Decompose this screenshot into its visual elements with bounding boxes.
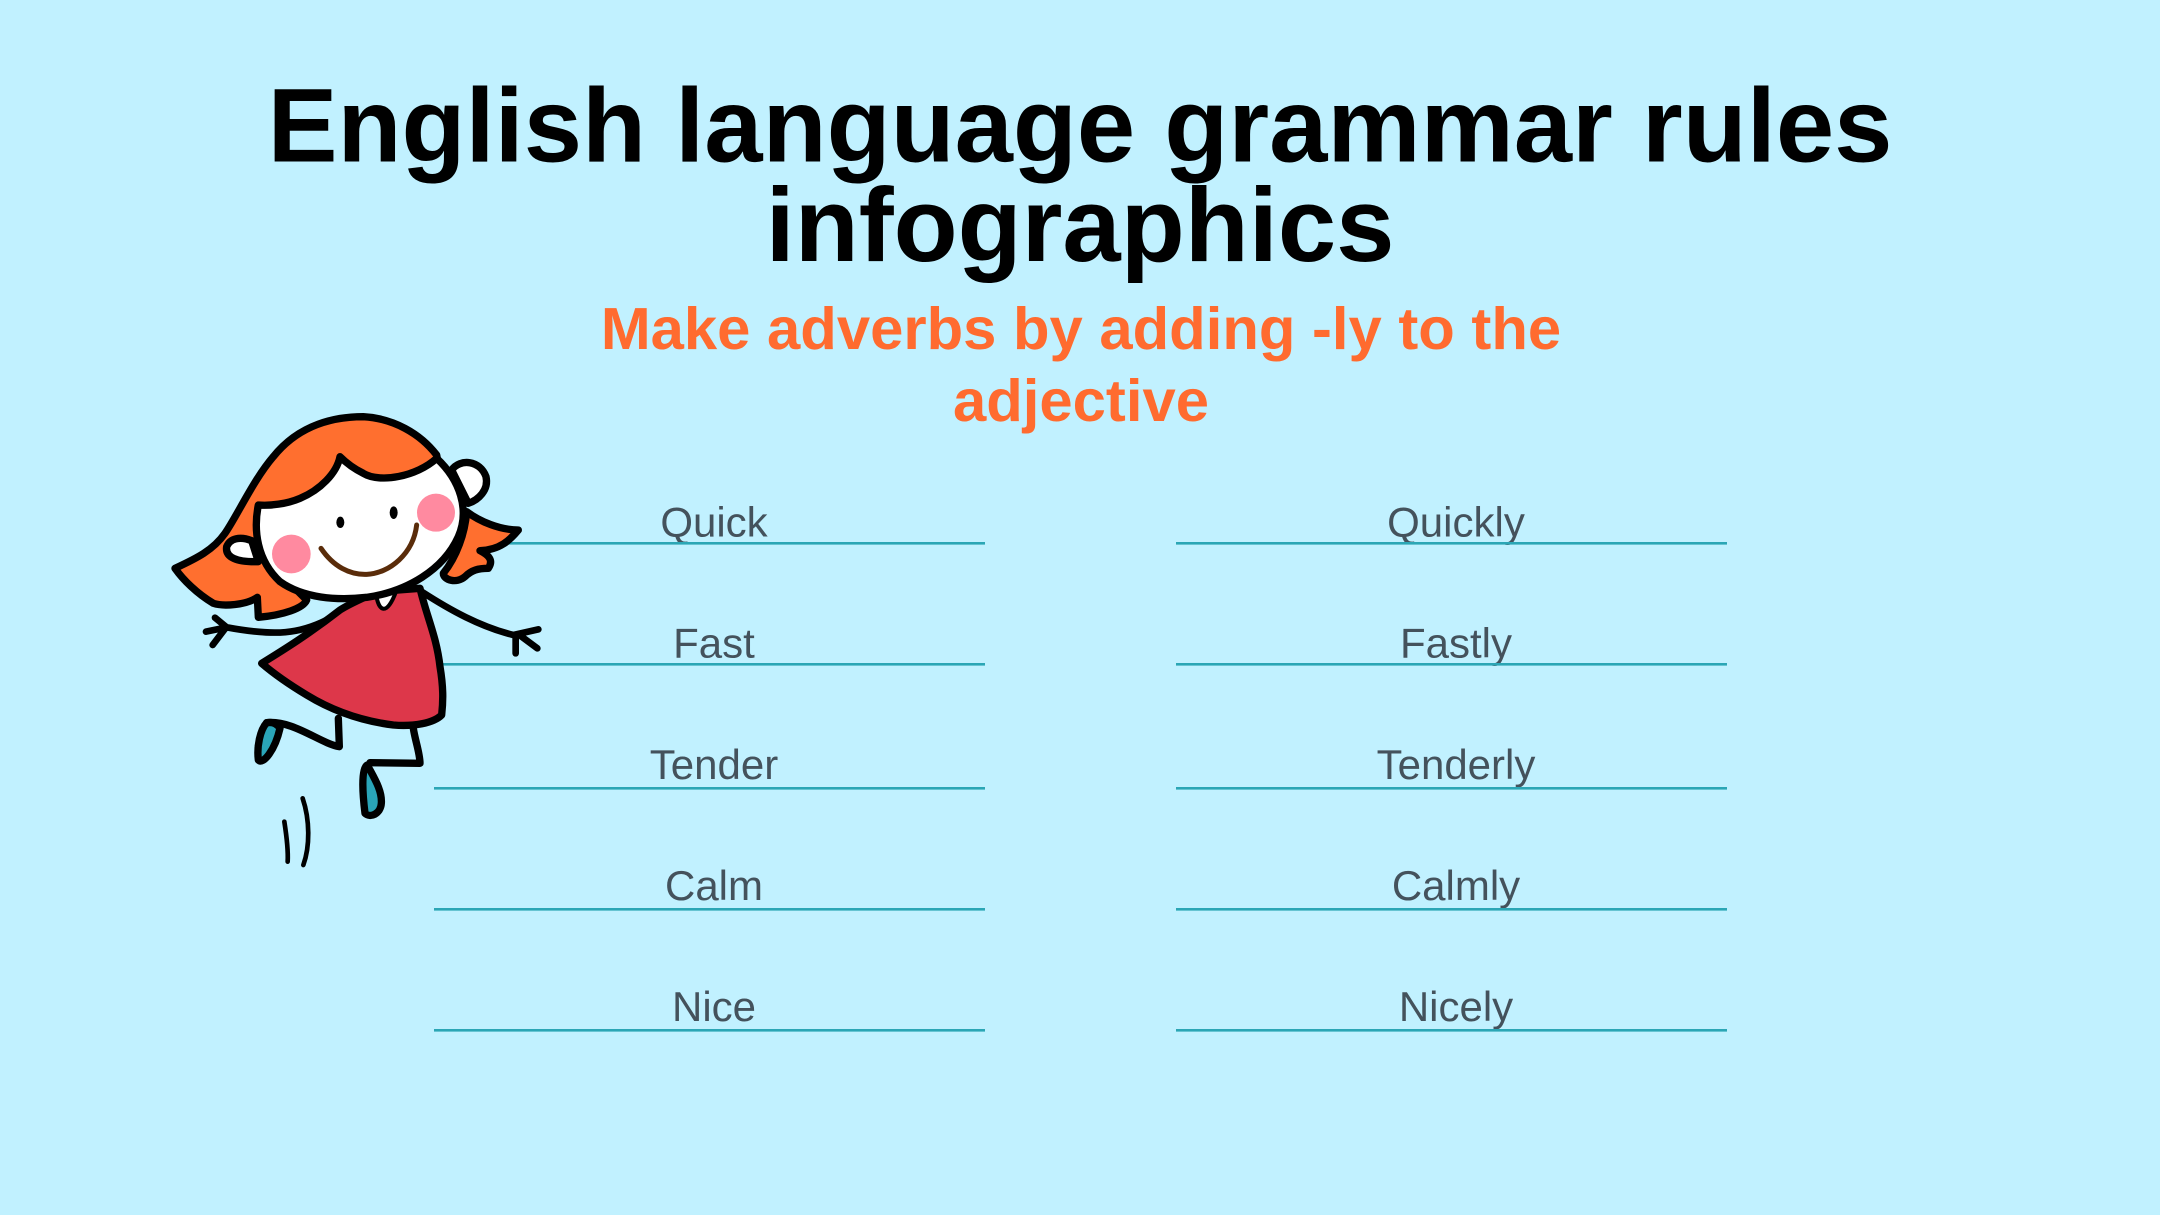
right ear [452, 462, 487, 503]
right eye [390, 506, 398, 519]
left cheek [272, 535, 311, 573]
collar [376, 592, 396, 609]
word row: Nicely: Nicely [1399, 983, 1513, 1030]
subtitle [601, 295, 1561, 434]
word row: Calm: Calm [665, 862, 763, 909]
right column: adverbs [1176, 498, 1727, 1032]
face [256, 457, 463, 599]
smile [321, 525, 417, 574]
word row: Quick: Quick [660, 498, 769, 546]
word row: Quickly: Quickly [1387, 498, 1525, 546]
left eye [336, 517, 344, 528]
left arm and hand [206, 618, 327, 645]
right hair [443, 512, 518, 581]
left column: adjectives [434, 498, 985, 1032]
motion lines [284, 798, 308, 865]
word row: Tender: Tender [650, 741, 778, 788]
word row: Tenderly: Tenderly [1377, 741, 1535, 788]
subtitle: Make adverbs by adding -ly to the [601, 295, 1561, 362]
subtitle: adjective [953, 367, 1209, 434]
word row: Calmly: Calmly [1392, 862, 1520, 909]
left ear [227, 538, 258, 562]
dress [262, 588, 443, 725]
title: English language grammar rules [268, 68, 1892, 184]
word row: Nice: Nice [672, 983, 756, 1030]
right arm and hand [422, 592, 538, 653]
illustration: jumping girl [175, 417, 538, 865]
left leg and shoe [258, 718, 339, 761]
hair and left locks [175, 417, 443, 617]
title: infographics [766, 167, 1394, 284]
right leg and shoe [363, 728, 420, 815]
word row: Fastly: Fastly [1400, 620, 1512, 666]
word row: Fast: Fast [673, 620, 755, 666]
title [268, 68, 1892, 284]
right cheek [417, 494, 455, 532]
